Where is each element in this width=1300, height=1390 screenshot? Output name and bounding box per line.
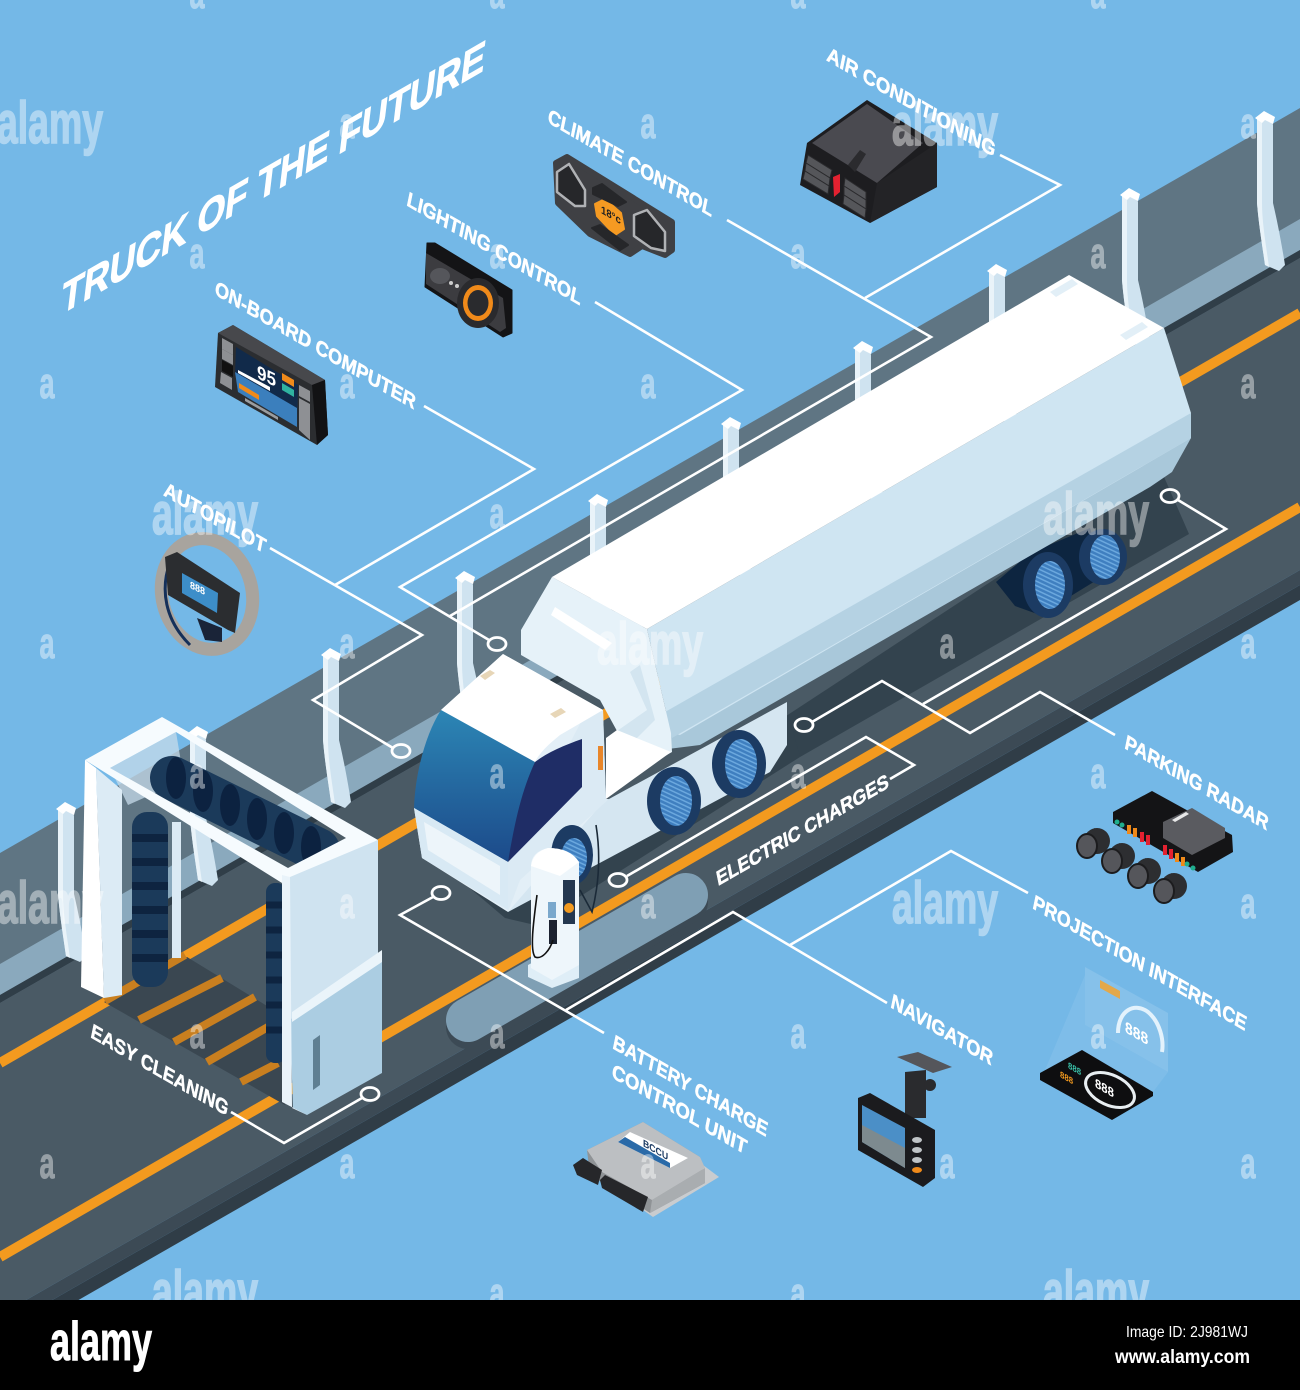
charger pad [468,895,686,1027]
label: easy cleaning: EASY CLEANING [89,1020,230,1121]
watermarks: a [640,99,656,148]
watermarks: a [640,879,656,928]
watermarks: a [190,1009,205,1058]
watermarks: alamy [1043,481,1149,547]
charging station [528,825,599,988]
watermarks: alamy [152,481,258,547]
icon: parking radar [1077,791,1233,903]
inner column [172,822,181,958]
watermarks: a [490,489,505,538]
icon: on-board computer: 95 [257,362,276,392]
icon: projection interface [1040,967,1168,1120]
footer url: www.alamy.com [1114,1347,1250,1368]
watermarks: alamy [152,1259,258,1325]
icon: climate control panel: 18°c [601,204,621,227]
watermarks: a [790,489,806,538]
watermarks: a [40,1139,55,1188]
watermarks: a [790,229,806,278]
label: projection interface: PROJECTION INTERFACE [1031,891,1248,1036]
watermarks: a [190,229,205,278]
wash floor [104,957,290,1105]
label: autopilot: AUTOPILOT [162,478,268,558]
icon: navigator dash cam [858,1052,952,1187]
watermarks: a [340,879,355,928]
watermarks: a [1240,1139,1256,1188]
watermarks: a [340,619,355,668]
watermarks: a [340,359,355,408]
right vertical brush [266,883,286,1063]
cab side panel [508,710,609,912]
label: battery charge: BATTERY CHARGE [611,1031,770,1142]
label: climate control: CLIMATE CONTROL [546,105,715,222]
label: lighting control: LIGHTING CONTROL [405,188,583,310]
watermarks: a [490,229,505,278]
floor stripes [105,955,278,1082]
watermarks: a [1090,1009,1106,1058]
side window [508,739,582,862]
watermarks: alamy [597,611,703,677]
orange road lines [0,313,1300,1257]
watermarks: a [940,359,955,408]
watermarks: a [1240,359,1256,408]
left vertical brush [132,812,168,987]
left column [81,760,104,998]
icon: on-board computer [215,325,328,445]
icon: air conditioning unit [800,100,937,223]
trailer front [521,577,672,768]
watermarks: a [340,99,355,148]
watermarks: a [940,1139,955,1188]
icon: projection interface: 888 [1060,1069,1073,1086]
rear wheels [996,528,1127,618]
truck [414,275,1191,912]
watermarks: a [40,359,55,408]
watermarks: alamy [1043,1259,1149,1325]
roadside posts [56,111,1285,962]
watermarks: a [1090,749,1106,798]
car wash [81,717,382,1115]
watermarks: a [1240,879,1256,928]
watermarks: a [1240,99,1256,148]
watermarks: a [490,1269,505,1318]
watermarks: a [790,749,806,798]
footer logo: alamy [50,1310,152,1372]
watermarks: a [1090,229,1106,278]
trailer underside band [660,413,1191,750]
icon: projection interface: 888 [1095,1075,1114,1101]
trailer side [647,328,1191,735]
label: on-board computer: ON-BOARD COMPUTER [213,277,418,415]
watermarks: a [1240,619,1256,668]
label: air conditioning: AIR CONDITIONING [825,43,997,162]
watermarks: a [640,359,656,408]
icon: lighting control [425,243,512,337]
title: TRUCK OF THE FUTURE [59,30,488,325]
label: electric charges: ELECTRIC CHARGES [715,770,890,891]
watermarks: a [490,1009,505,1058]
top frame [85,717,378,888]
chassis wheels [647,730,766,835]
watermarks: alamy [892,92,998,158]
label: control unit: CONTROL UNIT [610,1060,749,1159]
bumper [414,808,508,910]
watermarks: a [790,1269,806,1318]
label: navigator: NAVIGATOR [889,990,995,1071]
truck shadow on road [780,470,1189,757]
icon: battery charge control unit [573,1122,719,1217]
watermarks: alamy [0,870,103,936]
front wheel arch [551,825,593,885]
windshield [414,710,535,862]
watermarks: a [340,1139,355,1188]
icon: projection interface: 888 [1125,1018,1148,1049]
watermarks: a [190,749,205,798]
cab roof [441,654,603,762]
trailer top [552,275,1164,629]
watermarks: a [790,1009,806,1058]
watermarks: alamy [0,90,103,156]
footer bar [0,1300,1300,1390]
icon: autopilot steering wheel: 888 [190,580,205,598]
orange side marker [598,746,603,770]
icon: projection interface: 888 [1068,1060,1081,1077]
right column [290,840,378,1020]
connector lines [231,155,1226,1143]
icon: autopilot steering wheel [150,529,264,659]
watermarks: a [940,619,955,668]
shadow under cab [419,720,800,925]
horizontal brush [166,757,321,868]
icon: climate control panel [556,157,672,255]
watermarks: a [490,749,505,798]
icon: battery charge control unit: BCCU [643,1138,668,1163]
cab body [414,654,606,912]
footer image id: Image ID: 2J981WJ [1126,1324,1248,1341]
watermarks: a [40,619,55,668]
chassis side panel [508,702,787,912]
rear panel [110,732,184,805]
watermarks: a [640,1139,656,1188]
label: parking radar: PARKING RADAR [1123,731,1271,836]
watermarks: alamy [892,870,998,936]
